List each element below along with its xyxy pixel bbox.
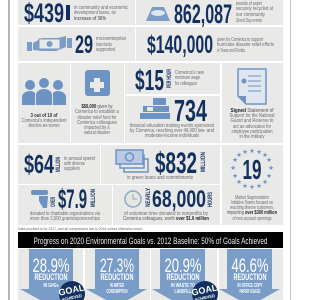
arrow: water reduction (86, 249, 147, 300)
panel: diverse suppliers: with diverse (64, 161, 85, 167)
arrow: paper reduction: IN OFFICE COPY (238, 283, 263, 289)
panel: women directors: Comerica's independent (22, 118, 67, 124)
panel: paper recycled (136, 0, 283, 29)
panel: national guard statement: in the military (240, 134, 265, 140)
arrow: water reduction: CONSUMPTION (106, 289, 128, 295)
panel: financial education: financial education training events sponsored (130, 123, 214, 129)
panel: green loans (101, 145, 220, 184)
panel: paper recycled: our community (236, 12, 265, 18)
panel: charitable donations (18, 184, 112, 225)
panel: paper recycled: pounds of paper (236, 1, 262, 7)
arrow: energy reduction: REDUCTION (34, 272, 68, 282)
icon: ring of stars: ★ (256, 182, 262, 190)
panel: hurricane relief: hurricane disaster relief efforts (217, 42, 274, 48)
panel: green loans: MILLION (201, 152, 207, 172)
panel: market segmentation (222, 145, 283, 225)
arrow: landfill reduction: 20.9% (164, 256, 202, 277)
panel: women directors: directors are women (28, 123, 60, 129)
panel: disaster relief fund: disaster relief fund for (78, 115, 117, 121)
panel: financial education (125, 93, 220, 143)
badge: goal achieved: GOAL (58, 282, 86, 298)
icon: ring of stars: ★ (242, 182, 248, 190)
panel: financial education: 734 (174, 93, 207, 128)
panel: volunteer hours: Comerica colleagues, worth over $1.6 million (123, 216, 209, 222)
panel: market segmentation: impacting over $300 million (227, 210, 277, 216)
panel: market segmentation: reaching diverse customers, (230, 205, 274, 211)
panel: national guard statement: Support for the National (230, 113, 274, 119)
arrow: water reduction: REDUCTION (100, 272, 134, 282)
icon: banknotes (116, 150, 148, 172)
arrow: water reduction: IN WATER (110, 283, 124, 289)
icon: hand with gift (31, 190, 48, 208)
panel: financial education: by Comerica, reaching over 49,900 low- and (130, 128, 214, 134)
panel: charitable donations: OVER (51, 197, 57, 207)
panel: minimum wage: for colleagues (175, 81, 197, 87)
panel: market segmentation: of new account openings (232, 216, 272, 222)
icon: ring of stars: ★ (262, 178, 268, 186)
panel: disaster relief fund: Comerica colleagues (77, 120, 117, 126)
icon: ring of stars: ★ (232, 172, 238, 180)
panel: diverse suppliers: in annual spend (64, 156, 95, 162)
panel: microenterprise loan funds (18, 27, 135, 61)
panel: hurricane relief: in Texas and Florida (217, 48, 245, 54)
panel: green loans: $832 (155, 147, 197, 180)
panel: community development loans: development loans, an (74, 10, 116, 16)
panel: charitable donations: more than 3,500 grants/sponsorships (30, 216, 100, 222)
panel: volunteer hours (113, 185, 220, 225)
icon: ring of stars: ★ (249, 147, 255, 155)
arrow: energy reduction: 28.9% (32, 256, 70, 277)
banner: environmental goals heading (18, 232, 283, 248)
panel: minimum wage (125, 63, 220, 97)
icon: clock (125, 191, 141, 207)
icon: ring of stars: ★ (236, 151, 242, 159)
panel: microenterprise loan funds: 29 (75, 31, 93, 59)
panel: national guard statement: act as advocates for (233, 124, 271, 130)
icon: ring of stars: ★ (256, 148, 262, 156)
arrow: landfill reduction (152, 249, 213, 300)
icon: ring of stars: ★ (236, 178, 242, 186)
panel: hurricane relief (136, 27, 283, 61)
icon: ring of stars: ★ (230, 164, 236, 172)
panel: women directors: 3 out of 10 of (30, 113, 58, 119)
panel: market segmentation: 19 (242, 154, 262, 185)
icon: stack of books (140, 98, 170, 119)
icon: ring of stars: ★ (232, 156, 238, 164)
panel: community development loans: increase of 36% (74, 16, 106, 22)
icon: ring of stars: ★ (268, 164, 274, 172)
panel: community development loans: in community and economic (74, 5, 128, 11)
panel: national guard statement: Signed Statement of (230, 108, 274, 114)
arrow: landfill reduction: REDUCTION (166, 272, 200, 282)
panel: paper recycled: Shred Day events (236, 18, 262, 24)
panel: diverse suppliers: suppliers (64, 166, 80, 172)
icon: ring of stars: ★ (249, 183, 255, 191)
icon: ring of stars (230, 147, 274, 191)
panel: national guard statement: employee participation (232, 129, 273, 135)
panel: arrows background (18, 249, 283, 300)
panel: diverse suppliers: MILLION (56, 157, 62, 172)
arrow: landfill reduction: IN WASTE TO (171, 283, 195, 289)
panel: diverse suppliers: $64 (24, 149, 54, 179)
panel: volunteer hours: 68,000 (152, 186, 206, 213)
arrow: paper reduction: REDUCTION (234, 272, 266, 282)
panel: volunteer hours: NEARLY (146, 188, 152, 207)
arrow: paper reduction: 46.6% (232, 256, 269, 277)
icon: ring of stars: ★ (262, 151, 268, 159)
panel: diverse suppliers (18, 145, 100, 184)
panel: minimum wage: PER HOUR (167, 69, 173, 88)
panel: microenterprise loan funds: loan funds (96, 42, 112, 48)
panel: disaster relief fund: natural disaster (84, 130, 110, 136)
arrow: energy reduction: IN GHGs (44, 283, 58, 289)
arrow: paper reduction (219, 249, 280, 300)
icon: first aid kit (85, 70, 110, 96)
panel: financial education: moderate-income individuals (145, 133, 199, 139)
panel: disaster relief fund: $50,000 given by (82, 104, 113, 110)
arrow: water reduction: 27.3% (100, 256, 134, 277)
icon: ring of stars: ★ (266, 156, 272, 164)
panel: volunteer hours: of volunteer time donated to nonprofits by (124, 211, 208, 217)
panel: minimum wage: $15 (135, 65, 164, 97)
icon: ring of stars: ★ (242, 148, 248, 156)
panel: national guard statement: Guard and Reserve to (230, 118, 274, 124)
panel: hurricane relief: given by Comerica to support (217, 37, 263, 43)
panel: minimum wage: Comerica's new (175, 70, 204, 76)
panel: volunteer hours: HOURS (208, 192, 214, 207)
panel: women directors (18, 63, 70, 143)
arrow: landfill reduction: LANDFILL (174, 289, 192, 295)
panel: charitable donations: donated to charitable organizations via (30, 211, 100, 217)
panel: market segmentation: Initiative Teams focused on (231, 200, 273, 206)
panel: disaster relief fund: impacted by a (84, 125, 110, 131)
panel: charitable donations: $7.9 (58, 184, 87, 214)
icon: handshake with banknote (27, 36, 72, 51)
panel: charitable donations: MILLION (91, 189, 97, 207)
panel: national guard statement (222, 63, 283, 143)
panel: disaster relief fund (71, 63, 124, 143)
panel: market segmentation: Market Segmentation (235, 195, 269, 201)
footnote: Data provided is for 2017, and all comparisons are to 2016 unless otherwise noted. (18, 227, 143, 231)
icon: ring of stars: ★ (266, 172, 272, 180)
icon: certificate (238, 69, 266, 104)
panel: community development loans (18, 0, 135, 28)
panel: hurricane relief: $140,000 (147, 31, 213, 59)
panel: minimum wage: minimum wage (175, 75, 200, 81)
panel: disaster relief fund: Comerica to establish a (75, 109, 119, 115)
panel: green loans: in green loans and commitments (127, 175, 193, 181)
arrow: paper reduction: PAPER USAGE (240, 289, 261, 295)
panel: paper recycled: securely recycled at (236, 6, 274, 12)
badge: goal achieved: GOAL (191, 282, 219, 298)
arrow: energy reduction (20, 249, 81, 300)
icon: three women (22, 78, 66, 105)
panel: microenterprise loan funds: microenterprise (96, 36, 126, 42)
panel: microenterprise loan funds: supported (96, 47, 115, 53)
